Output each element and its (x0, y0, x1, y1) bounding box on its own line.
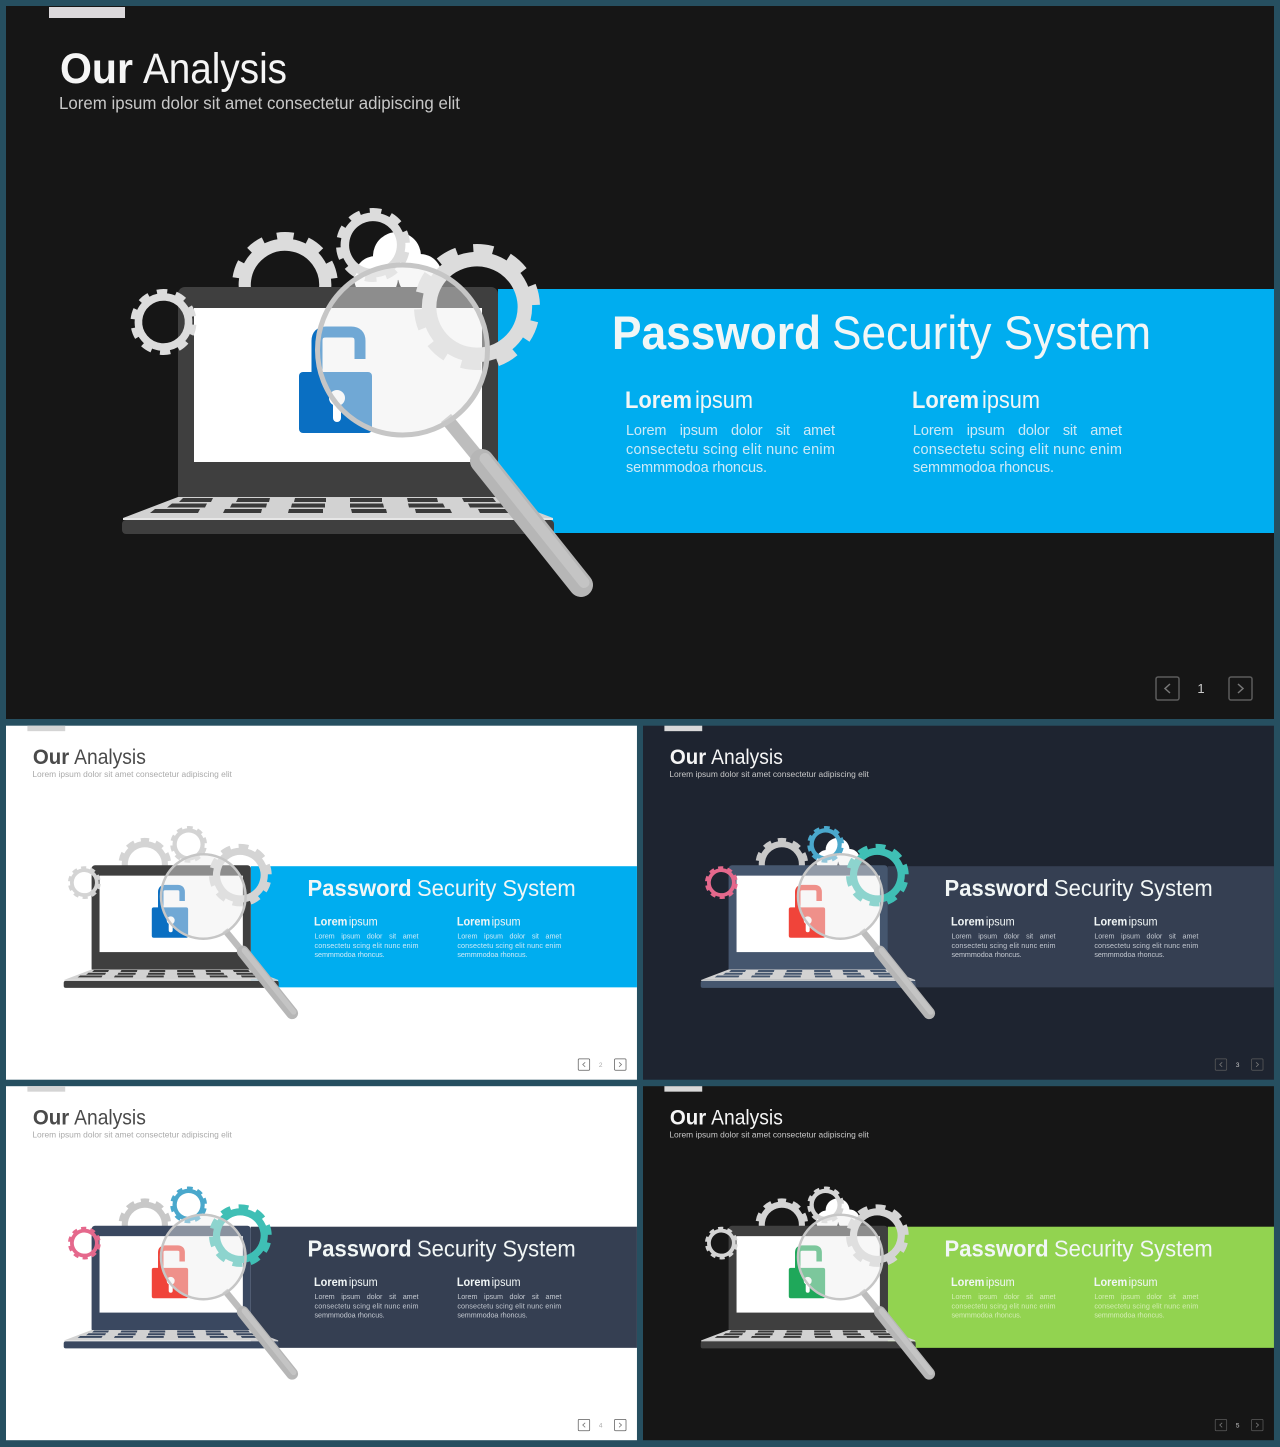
slide 4 banner heading: Password (308, 1236, 412, 1261)
slide 1 banner heading: Security System (832, 306, 1151, 359)
slide 3 column 1: Lorem (951, 914, 984, 928)
slide 2 pagination (578, 1059, 626, 1070)
slide 4 background (6, 1086, 637, 1440)
slide 3 column 1: semmmodoa rhoncus. (952, 950, 1022, 959)
slide 3 banner heading: Security System (1054, 875, 1213, 901)
slide 3 title: Our (670, 745, 706, 769)
slide 4: white slide with slate banner (6, 1086, 637, 1440)
slide 3 pagination (1215, 1059, 1263, 1070)
slide 4 column 1: consectetu scing elit nunc enim (315, 1302, 419, 1311)
slide 2 subtitle: Lorem ipsum dolor sit amet consectetur adipiscing elit (32, 769, 232, 779)
slide 2 column 1 (314, 914, 419, 959)
slide 5: black slide with green banner (643, 1086, 1274, 1440)
slide 5 accent tab (664, 1086, 702, 1092)
slide 4 accent tab (27, 1086, 65, 1092)
slide 2 title: Our (33, 745, 69, 769)
slide 5 background (643, 1086, 1274, 1440)
slide 2 column 2: ipsum (492, 914, 521, 928)
slide 1 title (60, 45, 287, 93)
slide 5 column 1: consectetu scing elit nunc enim (952, 1302, 1056, 1311)
slide 4 column 2 (457, 1275, 561, 1320)
slide 5 column 1: Lorem ipsum dolor sit amet (952, 1292, 1056, 1301)
slide 5 title: Analysis (711, 1105, 783, 1129)
slide 1 column 1: consectetu scing elit nunc enim (626, 442, 835, 458)
slide 3 subtitle: Lorem ipsum dolor sit amet consectetur adipiscing elit (669, 769, 869, 779)
slide 3 column 2: Lorem (1094, 914, 1127, 928)
slide 3 banner heading: Password (945, 875, 1049, 901)
slide 2 column 2 (457, 914, 561, 959)
slide 3 column 2: Lorem ipsum dolor sit amet (1094, 932, 1198, 941)
slide 4 title: Analysis (74, 1105, 146, 1129)
slide 1 illustration: laptop, gears, lock, magnifier (122, 205, 584, 585)
slide 5 subtitle: Lorem ipsum dolor sit amet consectetur adipiscing elit (669, 1129, 869, 1139)
slide 4 column 1: ipsum (349, 1275, 378, 1289)
slide 1 banner (498, 289, 1274, 533)
slide 4 title: Our (33, 1105, 69, 1129)
slide 4 column 1: Lorem (314, 1275, 347, 1289)
slide 3 title (670, 745, 783, 769)
slide 4 subtitle: Lorem ipsum dolor sit amet consectetur adipiscing elit (32, 1129, 232, 1139)
slide 5 banner (888, 1227, 1274, 1348)
slide 4 column 1: Lorem ipsum dolor sit amet (315, 1292, 419, 1301)
slide 1: large dark slide with blue banner (6, 6, 1274, 719)
slide 2 accent tab (27, 726, 65, 731)
slide 4 pagination (578, 1419, 626, 1431)
slide 3 column 1: Lorem ipsum dolor sit amet (952, 932, 1056, 941)
slide 1 column 1: semmmodoa rhoncus. (626, 460, 767, 476)
slide 1 subtitle: Lorem ipsum dolor sit amet consectetur adipiscing elit (59, 93, 460, 113)
slide 4 title (33, 1105, 146, 1129)
slide 2 pagination: 2 (599, 1062, 603, 1069)
slide 1 pagination (1156, 677, 1252, 700)
slide 2 background (6, 726, 637, 1080)
slide 2 title: Analysis (74, 745, 146, 769)
slide 3: navy slide with slate banner (643, 726, 1274, 1080)
slide 2: white slide with blue banner (6, 726, 637, 1080)
slide 1 column 1 (625, 387, 835, 476)
slide 5 pagination: 5 (1236, 1422, 1240, 1429)
slide 2 banner heading: Password (308, 875, 412, 901)
slide 1 column 2: ipsum (982, 387, 1040, 414)
slide 4 banner heading: Security System (417, 1236, 576, 1261)
slide 2 banner heading: Security System (417, 875, 576, 901)
slide 5 column 1: Lorem (951, 1275, 984, 1289)
slide 5 title: Our (670, 1105, 706, 1129)
slide 1 column 2 (912, 387, 1122, 476)
slide 5 banner heading (945, 1236, 1213, 1261)
slide 5 column 2: consectetu scing elit nunc enim (1094, 1302, 1198, 1311)
slide 3 background (643, 726, 1274, 1080)
slide 1 accent tab (49, 7, 125, 18)
slide 4 column 2: Lorem ipsum dolor sit amet (457, 1292, 561, 1301)
slide 5 banner heading: Security System (1054, 1236, 1213, 1261)
slide 4 pagination: 4 (599, 1422, 603, 1429)
slide 4 column 2: Lorem (457, 1275, 490, 1289)
slide 2 illustration (64, 825, 294, 1013)
slide 1 pagination: 1 (1197, 681, 1205, 696)
slide 1 column 1: Lorem (625, 387, 692, 414)
slide 3 pagination: 3 (1236, 1062, 1240, 1069)
slide 3 illustration (701, 825, 931, 1013)
slide 5 column 1: semmmodoa rhoncus. (952, 1311, 1022, 1320)
slide 5 column 2: semmmodoa rhoncus. (1094, 1311, 1164, 1320)
slide 3 column 1 (951, 914, 1056, 959)
slide 2 column 2: Lorem ipsum dolor sit amet (457, 932, 561, 941)
slide 2 title (33, 745, 146, 769)
slide 3 title: Analysis (711, 745, 783, 769)
slide 4 banner (251, 1227, 637, 1348)
slide 2 banner heading (308, 875, 576, 901)
slide 5 title (670, 1105, 783, 1129)
slide 4 column 2: ipsum (492, 1275, 521, 1289)
slide 1 banner heading: Password (612, 306, 821, 359)
slide 5 column 2: ipsum (1129, 1275, 1158, 1289)
slide 1 column 2: semmmodoa rhoncus. (913, 460, 1054, 476)
slide 3 accent tab (664, 726, 702, 731)
slide 2 column 2: consectetu scing elit nunc enim (457, 941, 561, 950)
slide 5 column 1: ipsum (986, 1275, 1015, 1289)
slide 4 column 2: consectetu scing elit nunc enim (457, 1302, 561, 1311)
slide 3 column 2 (1094, 914, 1198, 959)
slide 4 column 2: semmmodoa rhoncus. (457, 1311, 527, 1320)
slide 5 banner heading: Password (945, 1236, 1049, 1261)
slide 2 column 2: Lorem (457, 914, 490, 928)
slide 5 illustration (701, 1185, 931, 1374)
slide 4 column 1 (314, 1275, 419, 1320)
slide 5 column 2 (1094, 1275, 1198, 1320)
slide 1 banner heading (612, 306, 1151, 359)
slide 1 column 2: consectetu scing elit nunc enim (913, 442, 1122, 458)
slide 1 column 1: Lorem ipsum dolor sit amet (626, 423, 835, 439)
slide 1 title: Analysis (143, 45, 287, 93)
slide 1 title: Our (60, 45, 133, 93)
slide 2 banner (251, 866, 637, 987)
slide 3 column 2: consectetu scing elit nunc enim (1094, 941, 1198, 950)
slide 3 column 1: ipsum (986, 914, 1015, 928)
slide 1 background (6, 6, 1274, 719)
slide 3 banner heading (945, 875, 1213, 901)
slide 5 pagination (1215, 1419, 1263, 1431)
slide 4 illustration (64, 1185, 294, 1374)
slide 5 column 2: Lorem ipsum dolor sit amet (1094, 1292, 1198, 1301)
slide 2 column 1: semmmodoa rhoncus. (315, 950, 385, 959)
slide 1 column 1: ipsum (695, 387, 753, 414)
slide 3 column 2: ipsum (1129, 914, 1158, 928)
slide 5 column 1 (951, 1275, 1056, 1320)
slide 2 column 1: Lorem ipsum dolor sit amet (315, 932, 419, 941)
slide 2 column 1: Lorem (314, 914, 347, 928)
slide 5 column 2: Lorem (1094, 1275, 1127, 1289)
slide 3 banner (888, 866, 1274, 987)
slide 2 column 2: semmmodoa rhoncus. (457, 950, 527, 959)
slide 4 banner heading (308, 1236, 576, 1261)
slide 4 column 1: semmmodoa rhoncus. (315, 1311, 385, 1320)
slide 2 column 1: ipsum (349, 914, 378, 928)
slide 1 column 2: Lorem (912, 387, 979, 414)
slide 3 column 1: consectetu scing elit nunc enim (952, 941, 1056, 950)
slide 2 column 1: consectetu scing elit nunc enim (315, 941, 419, 950)
slide 1 column 2: Lorem ipsum dolor sit amet (913, 423, 1122, 439)
slide 3 column 2: semmmodoa rhoncus. (1094, 950, 1164, 959)
